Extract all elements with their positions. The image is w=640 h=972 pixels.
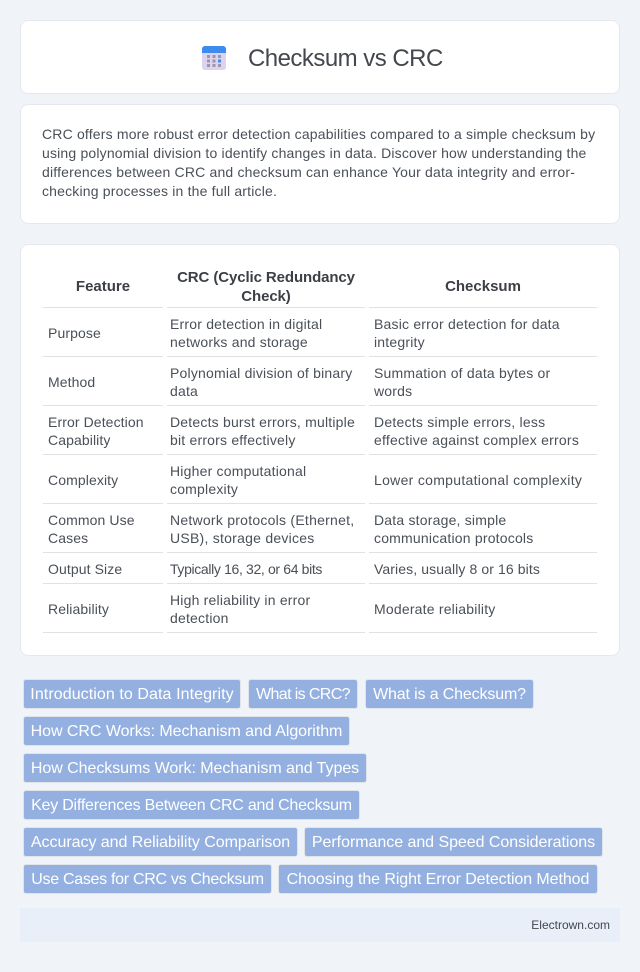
topic links (23, 679, 603, 894)
row: common use cases (48, 512, 533, 546)
row: error detection capability: Detects simple errors, less (374, 414, 545, 430)
row: output size: Typically 16, 32, or 64 bits (170, 561, 322, 577)
row: reliability: Moderate reliability (374, 601, 496, 617)
row: method: Polynomial division of binary (170, 365, 352, 381)
row: method: data (170, 383, 198, 399)
row: common use cases: Data storage, simple (374, 512, 506, 528)
intro paragraph (42, 126, 596, 199)
row: purpose: Purpose (48, 325, 101, 341)
chip: performance (304, 827, 603, 857)
table headers: CRC (Cyclic Redundancy (177, 269, 355, 286)
chip: introduction: Introduction to Data Integrity (30, 686, 234, 703)
header panel (20, 20, 620, 94)
row: complexity: complexity (170, 481, 238, 497)
chip: accuracy (23, 827, 298, 857)
chip: what is CRC: What is CRC? (256, 686, 350, 703)
chip: introduction (23, 679, 241, 709)
row: reliability: detection (170, 610, 229, 626)
intro paragraph: differences between CRC and checksum can enhance Your data integrity and error- (42, 164, 575, 180)
intro paragraph: CRC offers more robust error detection capabilities compared to a simple checksum by (42, 126, 595, 142)
row: complexity: Lower computational complexity (374, 472, 582, 488)
title: Checksum vs CRC (248, 45, 443, 72)
row: common use cases: Cases (48, 530, 88, 546)
row: purpose: Error detection in digital (170, 316, 322, 332)
row: common use cases: Common Use (48, 512, 135, 528)
row: error detection capability: Error Detection (48, 414, 144, 430)
chip: what is CRC (248, 679, 358, 709)
chip: performance: Performance and Speed Considerations (312, 834, 595, 851)
row: error detection capability: bit errors effectively (170, 432, 296, 448)
row: output size: Varies, usually 8 or 16 bits (374, 561, 540, 577)
row: common use cases: USB), storage devices (170, 530, 315, 546)
row: method: Method (48, 374, 95, 390)
chip: accuracy: Accuracy and Reliability Comparison (31, 834, 290, 851)
row: common use cases: communication protocols (374, 530, 533, 546)
chip: key differences (23, 790, 360, 820)
chip: use cases (23, 864, 272, 894)
row: purpose: integrity (374, 334, 425, 350)
table headers: Feature (76, 278, 130, 295)
footer (20, 908, 620, 942)
row: reliability (48, 592, 496, 626)
intro paragraph: using polynomial division to identify changes in data. Discover how understanding the (42, 145, 587, 161)
comparison table (43, 269, 597, 633)
row: reliability: High reliability in error (170, 592, 310, 608)
row: method (48, 365, 550, 399)
chip: what is a checksum: What is a Checksum? (373, 686, 526, 703)
row: reliability: Reliability (48, 601, 109, 617)
row: common use cases: Network protocols (Ethernet, (170, 512, 354, 528)
intro paragraph: checking processes in the full article. (42, 183, 277, 199)
row: method: words (374, 383, 412, 399)
chip: what is a checksum (365, 679, 534, 709)
row: purpose: Basic error detection for data (374, 316, 560, 332)
footer brand: Electrown.com (531, 918, 610, 932)
chip: choosing: Choosing the Right Error Detection Method (287, 871, 589, 888)
row: error detection capability: Capability (48, 432, 110, 448)
row: method: Summation of data bytes or (374, 365, 550, 381)
chip: key differences: Key Differences Between CRC and Checksum (31, 797, 352, 814)
row: output size: Output Size (48, 561, 122, 577)
row: complexity: Complexity (48, 472, 118, 488)
table headers: Checksum (445, 278, 521, 295)
row: complexity (48, 463, 582, 497)
table headers: Check) (241, 288, 291, 305)
row: purpose: networks and storage (170, 334, 308, 350)
comparison table panel (20, 244, 620, 656)
chip: how checksums work: How Checksums Work: Mechanism and Types (31, 760, 359, 777)
icon: calendar (202, 46, 226, 70)
row: purpose (48, 316, 560, 350)
chip: choosing (278, 864, 598, 894)
chip: how CRC works (23, 716, 350, 746)
row: error detection capability: effective against complex errors (374, 432, 579, 448)
chip: how CRC works: How CRC Works: Mechanism and Algorithm (31, 723, 342, 740)
row: output size (48, 561, 540, 577)
table headers (76, 269, 521, 305)
row: complexity: Higher computational (170, 463, 306, 479)
chip: use cases: Use Cases for CRC vs Checksum (31, 871, 264, 888)
row: error detection capability (48, 414, 579, 448)
row: error detection capability: Detects burst errors, multiple (170, 414, 355, 430)
chip: how checksums work (23, 753, 367, 783)
intro text panel (20, 104, 620, 224)
